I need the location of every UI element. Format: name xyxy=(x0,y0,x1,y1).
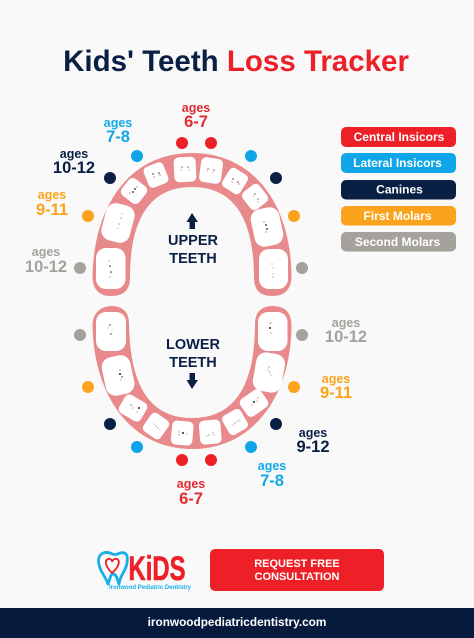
logo xyxy=(98,550,191,591)
age labels: ages xyxy=(60,147,88,161)
age labels: ages xyxy=(104,116,132,130)
age labels: 9-12 xyxy=(296,438,330,456)
upper teeth arch xyxy=(92,153,292,296)
age labels: 6-7 xyxy=(184,113,208,131)
legend: first molars: First Molars xyxy=(363,209,432,223)
age labels: 9-11 xyxy=(36,201,68,219)
age labels: ages xyxy=(258,459,286,473)
button: request consultation xyxy=(210,549,384,591)
lower teeth arch xyxy=(92,306,292,449)
title: Kids' Teeth Loss Tracker xyxy=(63,45,409,78)
age labels: 10-12 xyxy=(25,258,67,276)
logo tagline: Ironwood Pediatric Dentistry xyxy=(109,584,191,591)
lower teeth label: LOWER xyxy=(166,337,221,353)
age labels: 10-12 xyxy=(53,159,95,177)
lower tooth marks xyxy=(109,322,272,436)
age labels xyxy=(25,101,367,508)
icon: tooth xyxy=(98,552,127,584)
marker dots xyxy=(74,137,308,466)
age labels: 6-7 xyxy=(179,490,203,508)
upper tooth marks xyxy=(109,166,273,274)
lower teeth xyxy=(96,312,288,446)
legend: second molars: Second Molars xyxy=(355,235,440,249)
legend: canines: Canines xyxy=(376,182,423,196)
upper gum xyxy=(92,153,292,296)
age labels: ages xyxy=(177,477,205,491)
age labels: 7-8 xyxy=(260,472,284,490)
age labels: ages xyxy=(299,426,327,440)
upper teeth label: UPPER xyxy=(168,233,219,249)
footer bar xyxy=(0,608,474,638)
button: request consultation: REQUEST FREE xyxy=(254,558,340,570)
lower gum xyxy=(92,306,292,449)
logo wordmark: KiDS xyxy=(128,550,186,588)
footer bar: ironwoodpediatricdentistry.com xyxy=(148,615,326,629)
upper teeth xyxy=(96,156,288,289)
icon: heart xyxy=(106,559,119,573)
upper teeth label xyxy=(168,213,219,267)
lower teeth label: TEETH xyxy=(169,355,217,371)
age labels: ages xyxy=(332,316,360,330)
age labels: 9-11 xyxy=(320,384,352,402)
age labels: ages xyxy=(322,372,350,386)
legend: lateral insicors: Lateral Insicors xyxy=(353,156,442,170)
age labels: 10-12 xyxy=(325,328,367,346)
age labels: ages xyxy=(32,245,60,259)
legend: central insicors: Central Insicors xyxy=(354,130,445,144)
lower teeth label xyxy=(166,337,221,389)
upper teeth label: TEETH xyxy=(169,251,217,267)
legend xyxy=(341,127,456,252)
button: request consultation: CONSULTATION xyxy=(255,571,340,583)
age labels: ages xyxy=(182,101,210,115)
age labels: ages xyxy=(38,188,66,202)
age labels: 7-8 xyxy=(106,128,130,146)
